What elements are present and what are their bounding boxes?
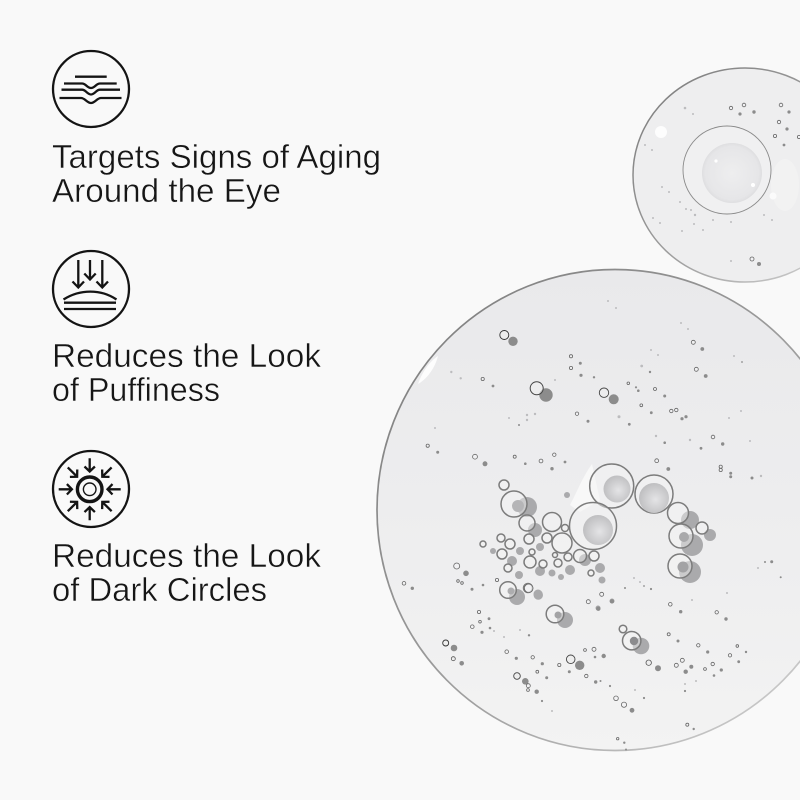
- heading text: Around the Eye: [52, 172, 281, 209]
- heading text: Targets Signs of Aging: [52, 138, 381, 175]
- bubble shadows, central cluster: [483, 462, 716, 654]
- icon: arrows pointing at concentric circles: [53, 451, 129, 527]
- heading text: [52, 138, 381, 209]
- heading text: of Puffiness: [52, 371, 220, 408]
- white glare behind bubbles: [570, 464, 600, 512]
- icon: skin layers: [53, 51, 129, 127]
- heading text: of Dark Circles: [52, 571, 267, 608]
- large serum droplet: [377, 270, 800, 750]
- scattered rings and shadows, upper half: [426, 300, 762, 480]
- icon: arrows pressing on mound: [53, 251, 129, 327]
- heading text: Reduces the Look: [52, 337, 322, 374]
- highlight: [418, 356, 438, 384]
- benefit: targets signs of aging: [52, 51, 381, 209]
- benefit: reduces dark circles: [52, 451, 322, 608]
- heading text: Reduces the Look: [52, 537, 322, 574]
- benefit: reduces puffiness: [52, 251, 322, 408]
- large bubbles, central cluster: [480, 464, 708, 650]
- heading text: [52, 537, 322, 608]
- scattered rings and shadows, lower half: [402, 560, 782, 750]
- small serum droplet: [633, 68, 800, 282]
- heading text: [52, 337, 322, 408]
